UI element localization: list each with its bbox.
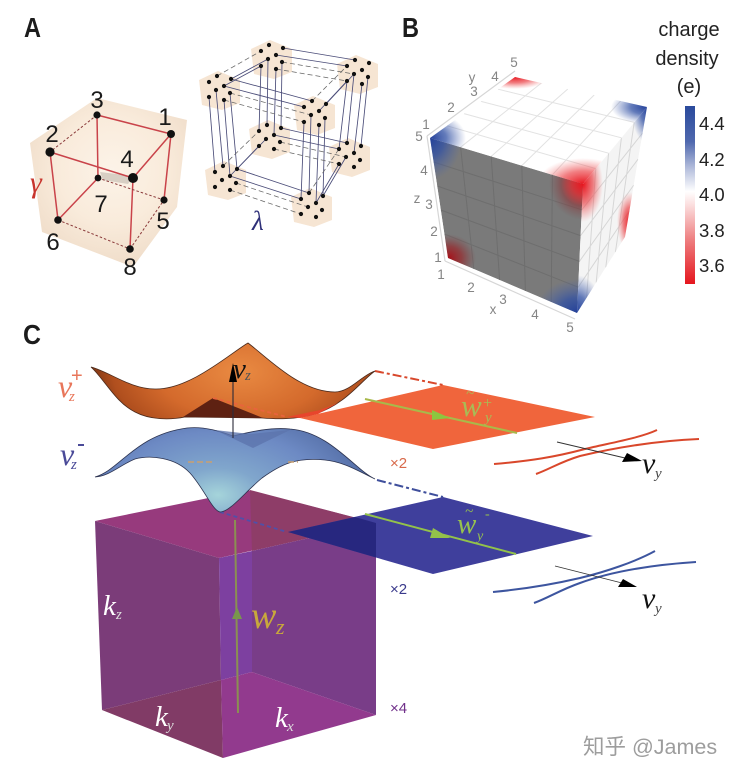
axis tick labels: 3 bbox=[425, 197, 433, 212]
cube top face bbox=[95, 490, 376, 558]
lambda symbol: λ bbox=[251, 206, 264, 236]
v_z minus label: v bbox=[60, 436, 75, 472]
vertical green arrow bbox=[232, 520, 242, 713]
legend title: charge bbox=[658, 19, 720, 41]
tick values: 4.0 bbox=[699, 184, 725, 205]
k labels bbox=[103, 590, 294, 735]
panel A: lambda lattice bbox=[199, 40, 378, 236]
watermark: 知乎 @James bbox=[583, 735, 717, 759]
axis tick labels: 5 bbox=[415, 129, 423, 144]
site numbers: 8 bbox=[123, 254, 137, 281]
panel B: charge density cube bbox=[414, 58, 647, 332]
orange band crossing bbox=[494, 430, 699, 482]
cube right face bbox=[252, 523, 376, 715]
cube centre stripe bbox=[219, 551, 252, 680]
gradient bar bbox=[685, 106, 695, 284]
w tilde y minus label: - bbox=[485, 507, 490, 522]
orange connector dashed line bbox=[375, 371, 443, 385]
corner blocks bbox=[199, 40, 378, 227]
axis tick labels: 5 bbox=[510, 55, 518, 70]
site numbers: 6 bbox=[46, 229, 60, 256]
k labels: y bbox=[165, 718, 174, 734]
panel A: gamma cube bbox=[30, 87, 187, 281]
vz arrow bbox=[229, 353, 251, 438]
v_z plus label bbox=[58, 365, 83, 405]
w tilde y plus label bbox=[461, 386, 493, 426]
heading: panel C: C bbox=[23, 319, 41, 350]
k labels: k bbox=[275, 702, 289, 734]
blue plane bbox=[288, 497, 593, 574]
heading: panel A: A bbox=[24, 12, 41, 43]
axis tick labels: 2 bbox=[467, 280, 475, 295]
translucent beige box bbox=[30, 98, 187, 267]
axis tick labels: 1 bbox=[422, 117, 430, 132]
blue band crossing bbox=[493, 551, 696, 617]
v_y label: v bbox=[642, 447, 656, 480]
axis tick labels: 4 bbox=[420, 163, 428, 178]
top face bbox=[430, 77, 647, 184]
w_z label: z bbox=[275, 614, 285, 639]
k labels: z bbox=[115, 607, 122, 623]
axis tick labels: 3 bbox=[470, 84, 478, 99]
w tilde y plus label: ~ bbox=[466, 386, 474, 402]
tick values: 4.4 bbox=[699, 113, 725, 134]
axis tick labels: z bbox=[414, 191, 421, 206]
tick values: 3.8 bbox=[699, 220, 725, 241]
lattice sites bbox=[45, 111, 175, 253]
axis tick labels: 4 bbox=[491, 69, 499, 84]
multiplicity x2 orange: ×2 bbox=[390, 455, 407, 472]
cube floor right bbox=[221, 672, 376, 758]
multiplicity x4: ×4 bbox=[390, 700, 407, 717]
cube top back shade bbox=[250, 490, 376, 551]
blue connector dashed line bbox=[220, 480, 443, 532]
v_z plus label: + bbox=[71, 365, 83, 387]
tick values bbox=[699, 113, 725, 276]
red solid edges bbox=[50, 115, 171, 249]
axis tick labels: 1 bbox=[437, 267, 445, 282]
plot axes bbox=[427, 71, 575, 319]
k labels: k bbox=[155, 701, 169, 733]
colour bar legend bbox=[655, 19, 725, 284]
axis tick labels: 1 bbox=[434, 250, 442, 265]
legend title bbox=[655, 19, 720, 98]
legend title: density bbox=[655, 48, 719, 70]
axis tick labels: 2 bbox=[430, 224, 438, 239]
axis tick labels: 5 bbox=[566, 320, 574, 335]
k labels: k bbox=[103, 590, 117, 622]
v_y label: y bbox=[653, 601, 662, 617]
v_y label bbox=[642, 447, 662, 482]
front face bbox=[430, 138, 583, 313]
k labels: x bbox=[286, 719, 294, 735]
site numbers: 7 bbox=[94, 191, 108, 218]
w tilde y plus label: + bbox=[482, 395, 493, 412]
site numbers: 5 bbox=[156, 208, 170, 235]
orbital dots bbox=[207, 43, 371, 219]
v_z plus label: z bbox=[68, 389, 75, 405]
w tilde y plus label: y bbox=[483, 410, 492, 426]
site numbers: 4 bbox=[120, 146, 134, 173]
cube left face bbox=[95, 521, 221, 710]
v_z minus label bbox=[60, 436, 84, 473]
panel C: purple Brillouin cube bbox=[95, 490, 407, 758]
w tilde y minus label bbox=[457, 504, 490, 544]
cube floor left bbox=[102, 680, 223, 758]
site numbers: 2 bbox=[45, 121, 59, 148]
legend title: (e) bbox=[677, 76, 701, 98]
orange plane bbox=[300, 385, 595, 449]
dashed bonds bbox=[217, 51, 354, 214]
solid bonds bbox=[209, 48, 368, 203]
axis tick labels bbox=[414, 55, 574, 335]
axis tick labels: 4 bbox=[531, 307, 539, 322]
vz arrow label: z bbox=[244, 368, 251, 384]
site numbers: 1 bbox=[158, 104, 172, 131]
vz arrow label: v bbox=[233, 353, 246, 385]
axis tick labels: x bbox=[490, 302, 497, 317]
v_y label bbox=[642, 582, 662, 617]
v_z minus label: z bbox=[70, 457, 77, 473]
blue energy surface bbox=[95, 428, 375, 512]
v_y label: y bbox=[653, 466, 662, 482]
green path with arrow bbox=[365, 514, 516, 554]
gamma symbol: γ bbox=[30, 166, 43, 199]
w tilde y minus label: y bbox=[475, 529, 484, 544]
heading: panel B: B bbox=[402, 12, 419, 43]
green path with arrow bbox=[365, 399, 517, 433]
axis tick labels: 2 bbox=[447, 100, 455, 115]
orange energy surface bbox=[91, 343, 375, 419]
tick values: 4.2 bbox=[699, 149, 725, 170]
dashed edges bbox=[50, 115, 164, 249]
site numbers: 3 bbox=[90, 87, 104, 114]
tick values: 3.6 bbox=[699, 255, 725, 276]
dark inner triangle bbox=[183, 398, 263, 418]
v_z plus label: v bbox=[58, 368, 73, 404]
w tilde y minus label: ~ bbox=[465, 504, 473, 520]
multiplicity x2 blue: ×2 bbox=[390, 581, 407, 598]
axis tick labels: y bbox=[469, 70, 476, 85]
w tilde y minus label: w bbox=[457, 508, 477, 540]
axis tick labels: 3 bbox=[499, 292, 507, 307]
v_y label: v bbox=[642, 582, 656, 615]
plane overlap with cube bbox=[288, 517, 376, 558]
w tilde y plus label: w bbox=[461, 388, 482, 423]
w_z label: w bbox=[251, 595, 277, 637]
site numbers bbox=[45, 87, 172, 281]
red overlap sliver bbox=[287, 403, 338, 418]
right face bbox=[577, 107, 647, 313]
